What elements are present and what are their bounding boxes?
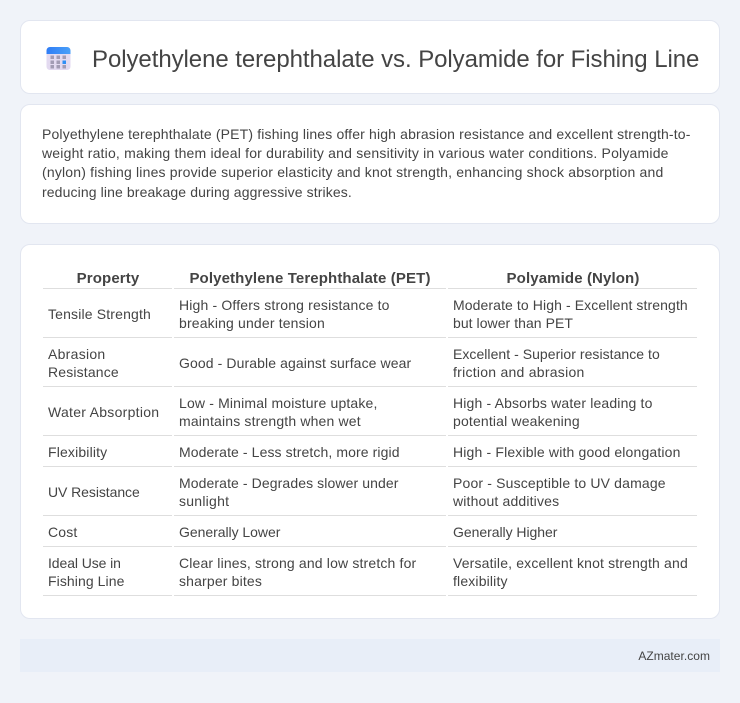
- row: ideal use: Ideal Use in: [48, 555, 121, 571]
- row: ideal use: Fishing Line: [48, 573, 124, 589]
- row: uv resistance: Poor - Susceptible to UV damage: [453, 475, 666, 491]
- row: uv resistance: Moderate - Degrades slower under: [179, 475, 399, 491]
- row: flexibility: Moderate - Less stretch, more rigid: [179, 444, 400, 460]
- row: water absorption: [48, 395, 653, 429]
- footer bar: [20, 639, 720, 672]
- row: uv resistance: [48, 475, 666, 509]
- row: flexibility: [48, 444, 681, 460]
- row: abrasion resistance: [48, 346, 660, 380]
- footer source: AZmater.com: [638, 649, 710, 663]
- intro text: Polyethylene terephthalate (PET) fishing lines offer high abrasion resistance and excellent strength-to-: [42, 126, 691, 142]
- intro text: [42, 126, 691, 200]
- row: uv resistance: without additives: [453, 493, 559, 509]
- row: tensile strength: breaking under tension: [179, 315, 325, 331]
- row: tensile strength: High - Offers strong resistance to: [179, 297, 390, 313]
- table header: Polyamide (Nylon): [507, 270, 639, 287]
- row: abrasion resistance: Abrasion: [48, 346, 106, 362]
- panel: comparison table: [20, 244, 720, 619]
- row: tensile strength: Tensile Strength: [48, 306, 151, 322]
- row: flexibility: Flexibility: [48, 444, 107, 460]
- row: cost: [48, 524, 558, 540]
- panel: header: [20, 20, 720, 94]
- intro text: weight ratio, making them ideal for durability and sensitivity in various water conditions. Polyamide: [42, 145, 669, 161]
- row: cost: Generally Higher: [453, 524, 557, 540]
- table header: [77, 270, 639, 287]
- row: ideal use: flexibility: [453, 573, 508, 589]
- title: Polyethylene terephthalate vs. Polyamide for Fishing Line: [92, 46, 699, 73]
- icon: calendar: [46, 47, 70, 70]
- row: abrasion resistance: Resistance: [48, 364, 119, 380]
- table header: Property: [77, 270, 139, 287]
- panel: introduction: [20, 104, 720, 224]
- row: ideal use: sharper bites: [179, 573, 262, 589]
- row: water absorption: maintains strength when wet: [179, 413, 361, 429]
- intro text: reducing line breakage during aggressive strikes.: [42, 184, 352, 200]
- row: cost: Cost: [48, 524, 77, 540]
- row: water absorption: High - Absorbs water leading to: [453, 395, 653, 411]
- intro text: (nylon) fishing lines provide superior elasticity and knot strength, enhancing shock absorption and: [42, 164, 663, 180]
- row: ideal use: Clear lines, strong and low stretch for: [179, 555, 416, 571]
- row: abrasion resistance: Good - Durable against surface wear: [179, 355, 411, 371]
- row: tensile strength: but lower than PET: [453, 315, 573, 331]
- row: tensile strength: Moderate to High - Excellent strength: [453, 297, 688, 313]
- row: water absorption: Water Absorption: [48, 404, 159, 420]
- row: cost: Generally Lower: [179, 524, 280, 540]
- row: abrasion resistance: Excellent - Superior resistance to: [453, 346, 660, 362]
- row: uv resistance: sunlight: [179, 493, 229, 509]
- row: ideal use: [48, 555, 688, 589]
- row: flexibility: High - Flexible with good elongation: [453, 444, 681, 460]
- row: tensile strength: [48, 297, 688, 331]
- row: uv resistance: UV Resistance: [48, 484, 140, 500]
- row: ideal use: Versatile, excellent knot strength and: [453, 555, 688, 571]
- row: water absorption: potential weakening: [453, 413, 580, 429]
- table header: Polyethylene Terephthalate (PET): [189, 270, 431, 287]
- row: water absorption: Low - Minimal moisture uptake,: [179, 395, 378, 411]
- row: abrasion resistance: friction and abrasion: [453, 364, 585, 380]
